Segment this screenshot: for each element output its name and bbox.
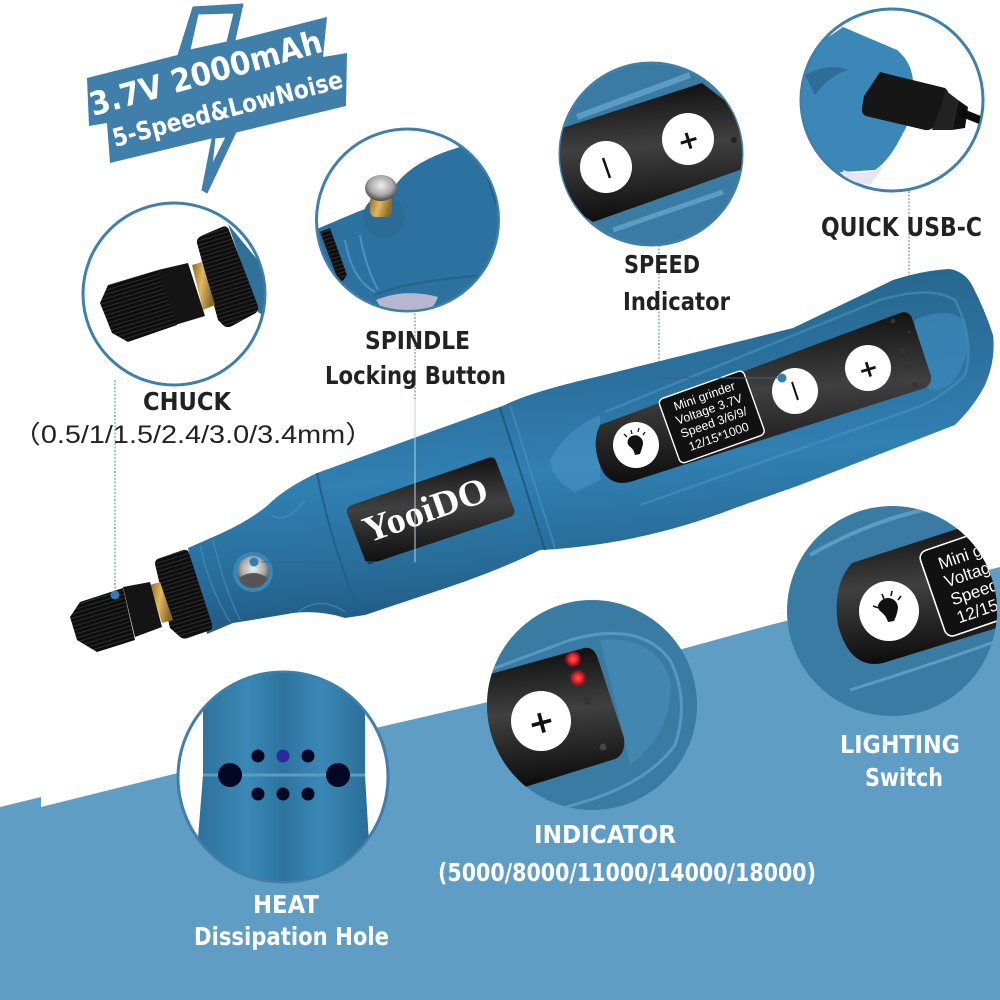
label: indicator speeds: INDICATOR: [534, 820, 676, 849]
label: speed indicator: SPEED: [624, 250, 700, 279]
plus button: +: [855, 353, 882, 385]
lighting button: [613, 422, 659, 468]
panel: chuck detail circle: [83, 203, 270, 385]
panel: speed buttons detail circle: [556, 63, 750, 245]
label: chuck: CHUCK: [143, 387, 232, 416]
spec label: 12/15*1000: [687, 420, 751, 454]
body ridges: [200, 292, 968, 622]
collar: [155, 550, 212, 639]
panel: lighting switch detail circle: 12/15: [954, 595, 1000, 627]
dotted leader lines: [115, 191, 909, 592]
label: indicator speeds: (5000/8000/11000/14000/18000): [438, 858, 816, 887]
label: heat dissipation hole: [194, 890, 389, 951]
spindle lock button: [233, 552, 273, 592]
control panel: [596, 312, 931, 483]
brand plate: [347, 457, 514, 564]
minus button: [772, 368, 818, 414]
spec label: [658, 370, 766, 464]
tool body: [188, 269, 994, 634]
label: lighting switch: LIGHTING: [840, 730, 960, 759]
spec label: Voltage 3.7V: [674, 391, 745, 428]
label: chuck: （0.5/1/1.5/2.4/3.0/3.4mm）: [12, 421, 374, 449]
panel-end highlight: [550, 415, 600, 492]
label: lighting switch: [840, 730, 960, 792]
panel: speed buttons detail circle: +: [674, 123, 703, 158]
panel: speed indicator detail circle: +: [523, 700, 559, 744]
panel: speed indicator detail circle: [482, 600, 697, 815]
panel: lighting switch detail circle: [787, 505, 1000, 716]
label: indicator speeds: [438, 820, 816, 887]
rotary tool: [70, 269, 994, 652]
label: speed indicator: [623, 250, 731, 316]
panel: lighting switch detail circle: Speed: [948, 575, 1000, 609]
chuck nut: [70, 588, 135, 652]
brand plate: YooiDO: [357, 470, 494, 551]
label: lighting switch: Switch: [865, 763, 943, 792]
badge: battery and speed lightning banner: 3.7V 2000mAh: [85, 23, 326, 124]
label: spindle locking button: SPINDLE: [365, 326, 470, 355]
panel: heat dissipation detail circle: [178, 660, 388, 900]
panel: lighting switch detail circle: Voltage: [942, 555, 1000, 591]
chuck neck: [123, 582, 162, 637]
plus button: [845, 345, 891, 391]
badge: battery and speed lightning banner: 5-Speed&LowNoise: [109, 65, 346, 153]
label: spindle locking button: Locking Button: [325, 361, 506, 390]
label: chuck: [12, 387, 374, 449]
label: speed indicator: Indicator: [623, 287, 731, 316]
panel: USB-C detail circle: [790, 9, 985, 191]
leader line segments over tool: [262, 331, 909, 562]
label: heat dissipation hole: Dissipation Hole: [194, 922, 389, 951]
indicator dots: [890, 318, 918, 388]
brass ring: [150, 582, 173, 623]
chuck pointer dot: [110, 590, 120, 600]
label: spindle locking button: [325, 326, 506, 390]
spec label: Mini grinder: [672, 379, 737, 414]
spec label: Speed 3/6/9/: [679, 404, 750, 441]
badge: battery and speed lightning banner: [85, 4, 347, 193]
back-end cap: [915, 313, 968, 390]
panel: spindle lock detail circle: [316, 129, 510, 320]
label: heat dissipation hole: HEAT: [253, 890, 319, 919]
